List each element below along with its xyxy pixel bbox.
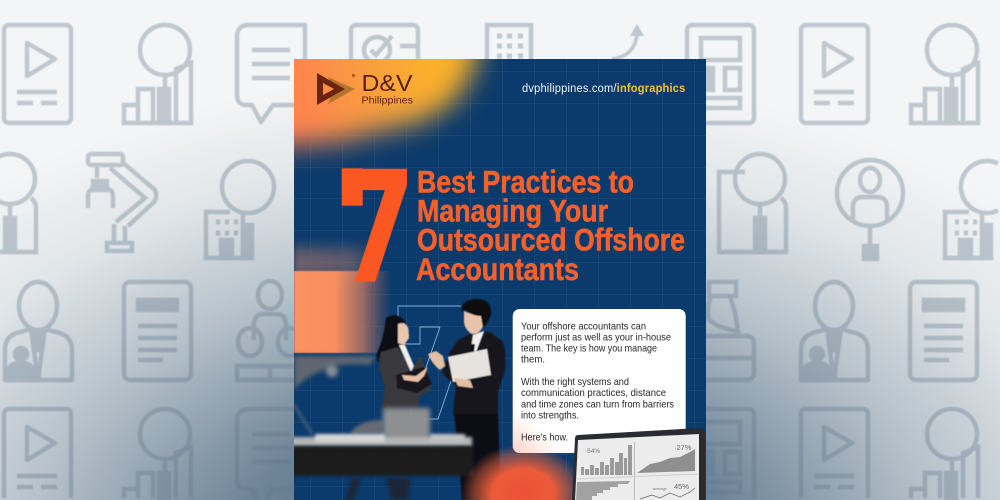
- website url: dvphilippines.com/infographics: [522, 83, 686, 95]
- icon: team group: [237, 281, 303, 380]
- icon: video document: [4, 25, 71, 123]
- area chart: ·27%: [674, 443, 692, 452]
- woman: [377, 315, 432, 410]
- icon: document: [910, 282, 977, 380]
- icon: growth arrow: [612, 24, 644, 59]
- intro text card: them.: [521, 354, 545, 366]
- intro text card: perform just as well as your in-house: [521, 332, 671, 344]
- title number 7: [342, 168, 408, 282]
- title: Managing Your: [417, 193, 608, 229]
- icon: business person: [801, 282, 868, 380]
- logo: D&V Philippines: [317, 73, 413, 106]
- panel: poster: [294, 59, 706, 500]
- icon: magnifier with bars: [124, 25, 191, 123]
- icon: business person: [5, 282, 72, 380]
- icon: office building: [487, 25, 531, 123]
- logo: D&V Philippines: Philippines: [362, 96, 413, 107]
- icon: video document: [801, 409, 868, 498]
- line chart: average: [653, 487, 667, 491]
- icon: hand stamp: [690, 282, 754, 380]
- intro text card: [513, 309, 686, 453]
- icon: document: [124, 282, 191, 380]
- icon: magnifier with bars: [911, 409, 978, 498]
- man: [428, 299, 505, 500]
- line chart: [640, 482, 695, 499]
- stair chart: [576, 481, 630, 500]
- title: Accountants: [416, 251, 579, 287]
- line chart: 45%: [674, 482, 689, 491]
- photo: two accountants: [377, 299, 505, 500]
- title number 7: 7: [338, 138, 416, 319]
- icon: page layout: [687, 25, 754, 123]
- blurred desk and monitor: [290, 405, 473, 500]
- left orange blurred glow: [294, 248, 392, 390]
- icon: logo play triangles: [317, 73, 355, 105]
- bottom orange glow: [462, 446, 574, 500]
- icon: video document: [801, 25, 868, 123]
- icon: robot arm: [88, 154, 156, 251]
- intro text card: into strengths.: [521, 409, 579, 421]
- icon: magnifier with bars: [124, 409, 191, 498]
- intro text card: Your offshore accountants can: [521, 320, 646, 332]
- icon: magnifier with chart: [0, 154, 36, 252]
- icon: magnifier with building: [945, 161, 998, 258]
- icon: magnifier with chart: [719, 154, 786, 252]
- intro text card: With the right systems and: [521, 376, 629, 388]
- intro text card: communication practices, distance: [521, 387, 666, 399]
- title: Outsourced Offshore: [417, 222, 685, 258]
- bar chart: ·54%: [585, 448, 600, 455]
- title: [416, 164, 685, 287]
- intro text card: Here's how.: [521, 432, 568, 444]
- tablet with charts: [572, 428, 705, 500]
- icon: form with check badge: [351, 25, 418, 123]
- icon: magnifier with bars: [911, 25, 978, 123]
- decorative 7 outline: [398, 306, 465, 419]
- icon: speech bubble: [237, 25, 305, 122]
- top-left gradient glow: [294, 59, 500, 170]
- title: Best Practices to: [417, 164, 634, 200]
- intro text card: team. The key is how you manage: [521, 343, 657, 355]
- icon: page layout: [687, 409, 754, 498]
- icon: magnifier with person: [837, 160, 903, 259]
- icon: speech bubble: [237, 409, 305, 498]
- icon: magnifier with building: [206, 161, 274, 258]
- icon: video document: [4, 409, 71, 498]
- logo: D&V Philippines: D&V: [362, 70, 413, 96]
- intro text card: and time zones can turn from barriers: [521, 398, 674, 410]
